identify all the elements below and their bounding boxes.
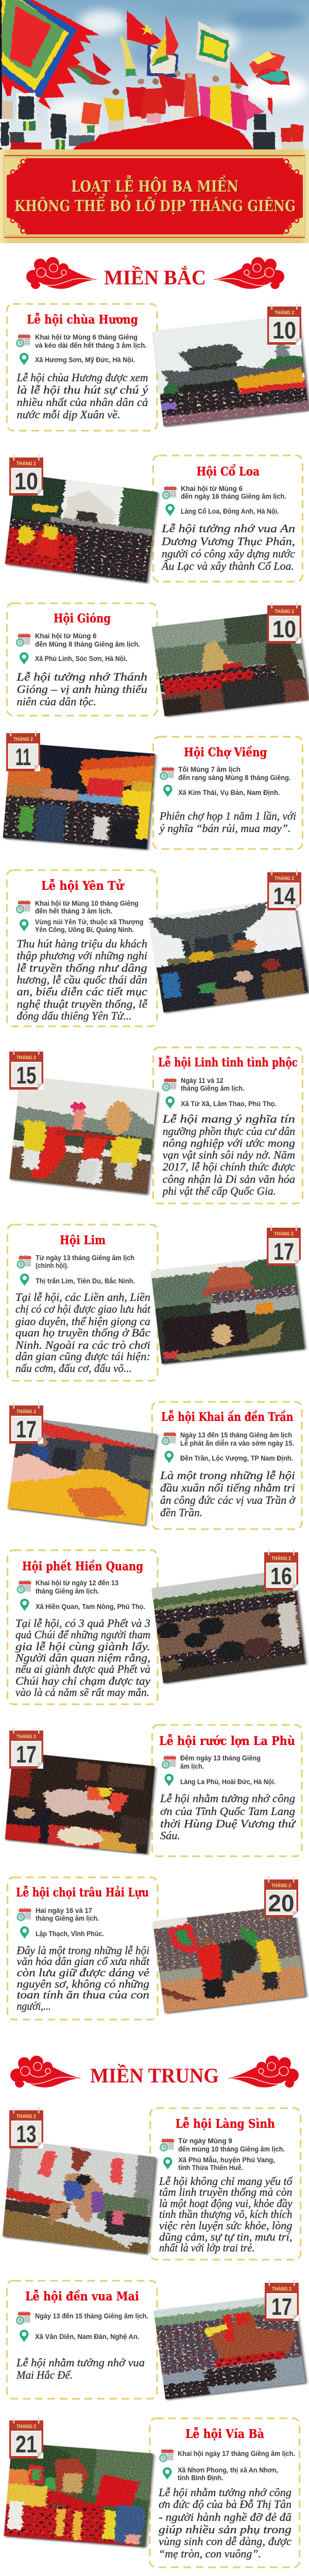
- description: [161, 522, 295, 572]
- panel: Lễ hội rước lợn La Phù: [5, 1725, 302, 1856]
- description: hương, lễ cầu quốc thái dân: [16, 973, 147, 986]
- description: Ninh. Ngoài ra các trò chơi: [15, 1338, 150, 1351]
- description: Phiên chợ họp 1 năm 1 lần, với: [159, 809, 296, 822]
- location text: [178, 2466, 278, 2482]
- people: [104, 98, 124, 121]
- date text: đến ngày 16 tháng Giêng âm lịch.: [181, 493, 286, 500]
- calendar: 13: [9, 2107, 43, 2148]
- photo: Cổ Loa: [5, 473, 159, 583]
- description: niên của dân tộc.: [16, 695, 96, 708]
- photo: rước lợn La Phù: [5, 1752, 156, 1855]
- description: vào là cả năm sẽ rất may mắn.: [15, 1686, 149, 1699]
- panel: Lễ hội Làng Sình: [3, 2107, 301, 2260]
- calendar: 17: 17: [271, 2293, 292, 2320]
- description: Người dân quan niệm rằng,: [15, 1651, 150, 1664]
- description: ơn đức độ của bà Đỗ Thị Tân: [159, 2498, 291, 2511]
- festival title: Lễ hội đền vua Mai: [25, 2290, 139, 2303]
- description: Là một trong những lễ hội: [160, 1469, 295, 1482]
- description: quan họ truyền thống ở Bắc: [15, 1326, 150, 1339]
- info card: [150, 2418, 300, 2567]
- calendar: 20: 20: [268, 1890, 295, 1917]
- date text: đến Mùng 8 tháng Giêng âm lịch.: [35, 640, 140, 648]
- calendar: 14: [267, 869, 301, 910]
- main title: [14, 175, 296, 215]
- description: [160, 1469, 296, 1519]
- hero photo: festival procession with flags: [0, 0, 309, 149]
- photo: Linh tinh tình phộc: [9, 1076, 159, 1195]
- description: ân công đức các vị vua Trần ở: [160, 1494, 296, 1506]
- title banner: [0, 149, 309, 243]
- date text: [181, 1077, 244, 1092]
- description: người có công xây dựng nước: [162, 547, 295, 560]
- date text: Từ ngày Mùng 9: [178, 2137, 232, 2145]
- calendar: 13: 13: [16, 2121, 36, 2147]
- description: Lễ hội không chỉ mang yếu tố: [159, 2175, 293, 2188]
- panel: Hội Cổ Loa: [5, 454, 302, 583]
- calendar: 11: [6, 730, 40, 771]
- panel: Hội Gióng: [7, 602, 309, 717]
- banners: [17, 93, 36, 121]
- location text: Xã Vân Diên, Nam Đàn, Nghệ An.: [35, 2333, 140, 2341]
- section heading: Miền Bắc: MIỀN BẮC: [104, 266, 206, 289]
- date text: Tối Mùng 7 âm lịch: [178, 766, 241, 773]
- info card: [7, 2281, 157, 2399]
- description: vạn vật sinh sôi nảy nở. Năm: [163, 1148, 295, 1161]
- description: Âu Lạc và xây thành Cổ Loa.: [161, 560, 294, 572]
- description: [16, 1944, 150, 2012]
- description: [16, 371, 148, 421]
- description: [16, 937, 148, 1022]
- description: thập phương với những nghi: [16, 949, 147, 962]
- description: phi vật thể cấp Quốc Gia.: [162, 1184, 276, 1197]
- description: [160, 1792, 296, 1842]
- location text: Xã Hương Sơn, Mỹ Đức, Hà Nội.: [35, 356, 135, 364]
- icon: calendar clock: [162, 486, 177, 499]
- festival title: Hội Chợ Viềng: [184, 745, 267, 759]
- location text: Xã Tứ Xã, Lâm Thao, Phú Thọ.: [181, 1100, 277, 1108]
- calendar: 17: [267, 1225, 301, 1266]
- location text: [35, 918, 144, 934]
- date text: [181, 485, 286, 500]
- photo: Vía Bà: [0, 2442, 154, 2548]
- info card: [150, 2108, 301, 2260]
- festival title: Lễ hội rước lợn La Phù: [159, 1734, 295, 1748]
- icon: calendar clock: [16, 1580, 31, 1594]
- date text: [35, 632, 140, 648]
- description: Tại lễ hội, có 3 quả Phết và 3: [15, 1617, 150, 1630]
- description: [16, 2356, 145, 2381]
- date text: Lễ phát ấn diễn ra vào sớm ngày 15.: [180, 1439, 294, 1447]
- date text: [178, 766, 290, 782]
- description: quả Chúi để những người tham: [15, 1628, 150, 1641]
- description: - người hành nghề đỡ đẻ đã: [159, 2511, 291, 2523]
- photo: Hội Gióng: [152, 611, 309, 717]
- description: văn hóa dân gian cổ xưa nhất: [16, 1955, 150, 1968]
- icon: calendar clock: [162, 1078, 177, 1091]
- festival title: Hội phết Hiền Quang: [22, 1560, 143, 1573]
- date text: Khai hội ngày 17 tháng Giêng âm lịch.: [178, 2450, 295, 2458]
- date text: và kéo dài đến hết tháng 3 âm lịch.: [35, 342, 147, 349]
- date text: đến rạng sáng Mùng 8 tháng Giêng.: [178, 774, 290, 782]
- icon: location pin: [166, 1096, 175, 1109]
- info card: [153, 1047, 302, 1204]
- description: Lễ hội tưởng nhớ Thánh: [16, 670, 147, 683]
- info card: [153, 455, 302, 582]
- icon: location pin: [163, 2467, 172, 2480]
- festival title: Hội Lim: [60, 1233, 106, 1247]
- festival title: Lễ hội chọi trâu Hải Lựu: [16, 1886, 149, 1900]
- icon: calendar clock: [160, 2138, 174, 2151]
- calendar: 10: 10: [272, 616, 296, 642]
- icon: calendar clock: [16, 2311, 30, 2325]
- icon: calendar clock: [162, 1432, 176, 1445]
- festival title: Lễ hội chùa Hương: [27, 313, 138, 327]
- icon: calendar clock: [159, 2449, 174, 2462]
- info card: [7, 1225, 158, 1381]
- location text: Vùng núi Yên Tử, thuộc xã Thượng: [35, 918, 144, 926]
- description: Lễ hội tưởng nhớ vua An: [161, 522, 295, 535]
- date text: Từ ngày 13 tháng Giêng âm lịch: [36, 1254, 134, 1262]
- panel: Hội Chợ Viềng: [3, 730, 302, 850]
- description: thời Hùng Duệ Vương thứ: [160, 1817, 296, 1830]
- panel: Hội phết Hiền Quang: [7, 1549, 306, 1704]
- info card: [7, 1550, 158, 1704]
- description: Sáu.: [160, 1829, 180, 1842]
- description: [15, 1291, 151, 1375]
- photo: chợ Viềng: [3, 742, 156, 850]
- description: đầu xuân nổi tiếng nhằm tri: [160, 1481, 295, 1494]
- description: Tại lễ hội, các Liền anh, Liền: [15, 1291, 150, 1303]
- date text: [35, 333, 147, 349]
- date text: Đêm ngày 13 tháng Giêng: [180, 1754, 261, 1762]
- description: nông nghiệp với ước mong: [163, 1137, 295, 1149]
- description: dũng cảm, sự tự tin, mưu trí,: [159, 2230, 293, 2243]
- location text: Yên Công, Uông Bí, Quảng Ninh.: [35, 926, 134, 934]
- photo: phết Hiền Quang: [152, 1569, 306, 1684]
- calendar: 10: [267, 303, 301, 345]
- photo: Yên Tử: [149, 898, 309, 1013]
- description: nếu ai giành được quả Phết và: [15, 1663, 150, 1675]
- icon: calendar clock: [16, 1255, 31, 1268]
- section heading: Miền Bắc: [26, 257, 284, 289]
- date text: đến mùng 10 tháng Giêng âm lịch.: [178, 2145, 285, 2153]
- icon: location pin: [20, 919, 29, 931]
- icon: location pin: [165, 1451, 174, 1463]
- panel: Lễ hội đền vua Mai: [7, 2280, 307, 2400]
- date text: tháng Giêng âm lịch.: [36, 1914, 99, 1922]
- section heading: Miền Trung: [10, 2056, 299, 2088]
- info card: [152, 1402, 302, 1529]
- description: [15, 1617, 150, 1699]
- panel: Lễ hội Vía Bà: [0, 2417, 300, 2567]
- description: ý nghĩa “bán rủi, mua may”.: [159, 822, 290, 835]
- icon: location pin: [20, 1926, 29, 1939]
- panel: Lễ hội chùa Hương: [7, 303, 309, 431]
- location text: Xã Phù Linh, Sóc Sơn, Hà Nội.: [35, 655, 127, 663]
- calendar: 17: 17: [273, 1238, 294, 1265]
- description: Lễ hội nhằm tưởng nhớ vua: [16, 2356, 145, 2369]
- big flag: [2, 0, 99, 110]
- icon: calendar clock: [160, 767, 174, 780]
- calendar: 20: [264, 1876, 298, 1918]
- description: lễ truyền thống như dâng: [16, 961, 147, 974]
- icon: location pin: [163, 2157, 172, 2170]
- description: nhất là với lớp trai trẻ.: [159, 2241, 254, 2254]
- festival title: Lễ hội Yên Tử: [41, 879, 125, 893]
- centre flags: [127, 11, 163, 45]
- description: [159, 809, 296, 835]
- description: Dương Vương Thục Phán,: [161, 535, 295, 548]
- calendar: 10: [267, 602, 301, 643]
- festival title: Hội Gióng: [54, 612, 111, 625]
- photo: Hội Lim: [148, 1256, 309, 1365]
- description: [162, 1112, 295, 1197]
- description: nhiều nhất của nhân dân cả: [16, 396, 148, 409]
- description: 2017, lễ hội chính thức được: [163, 1160, 295, 1173]
- icon: location pin: [165, 1774, 174, 1786]
- info card: [153, 737, 302, 849]
- location text: [178, 2156, 275, 2172]
- panel: Lễ hội chọi trâu Hải Lựu: [7, 1876, 307, 2020]
- festival title: Lễ hội Làng Sình: [176, 2117, 275, 2131]
- description: Mai Hắc Đế.: [16, 2368, 73, 2381]
- location text: Xã Kim Thái, Vụ Bản, Nam Định.: [178, 789, 280, 796]
- date text: [180, 1754, 261, 1770]
- description: người,...: [16, 1999, 51, 2012]
- description: nấu cơm, đấu cơ, đấu võ...: [15, 1362, 132, 1375]
- panel: Lễ hội Linh tinh tình phộc: [9, 1047, 302, 1204]
- info card: [7, 603, 157, 716]
- date text: Khai hội từ Mùng 6: [35, 632, 97, 640]
- calendar: 10: [9, 454, 43, 496]
- calendar: 17: [9, 1402, 43, 1444]
- date text: Khai hội từ Mùng 6: [181, 485, 243, 493]
- date text: Ngày 11 và 12: [181, 1077, 224, 1084]
- description: giúp nhiều sản phụ trong: [159, 2523, 291, 2536]
- icon: location pin: [20, 2330, 29, 2342]
- info card: [7, 870, 157, 1026]
- description: gia lễ hội cùng giành lấy.: [15, 1640, 150, 1653]
- date text: Khai hội từ Mùng 6 tháng Giêng: [35, 333, 138, 341]
- description: Lễ hội chùa Hương được xem: [16, 371, 148, 384]
- date text: Khai hội từ ngày 12 đến 13: [36, 1579, 118, 1587]
- info card: [152, 1725, 302, 1856]
- description: Lễ hội nhằm tưởng nhớ công: [160, 1792, 295, 1805]
- description: Đây là một trong những lễ hội: [16, 1944, 149, 1957]
- info card: [7, 1877, 158, 2020]
- calendar: 21: 21: [15, 2431, 37, 2458]
- description: còn lưu giữ được dáng vẻ: [16, 1966, 149, 1979]
- calendar: 14: 14: [273, 883, 296, 909]
- description: công nhận là Di sản văn hóa: [163, 1173, 295, 1185]
- calendar: 17: [265, 2280, 299, 2321]
- date text: âm lịch.: [180, 1762, 204, 1770]
- description: tinh thần thượng võ, kích thích: [159, 2208, 293, 2221]
- date text: [36, 1254, 134, 1269]
- icon: location pin: [20, 652, 29, 665]
- icon: location pin: [166, 504, 175, 516]
- icon: calendar clock: [16, 1908, 31, 1921]
- date text: tháng Giêng âm lịch.: [181, 1084, 244, 1092]
- date text: Khai hội từ Mùng 10 tháng Giêng: [35, 900, 139, 907]
- description: đền Trần.: [160, 1506, 202, 1519]
- description: vùng sinh con dễ dàng, được: [159, 2535, 291, 2548]
- description: giao duyên, thể hiện giọng ca: [15, 1315, 150, 1328]
- description: chị có cơ hội được giao lưu hát: [15, 1302, 151, 1315]
- description: đóng dấu thiêng Yên Tử...: [16, 1009, 132, 1022]
- description: [16, 670, 147, 708]
- festival title: Lễ hội Vía Bà: [185, 2427, 264, 2441]
- location text: Xã Nhơn Phong, thị xã An Nhơn,: [178, 2466, 278, 2474]
- description: ngưỡng phồn thực của cư dân: [163, 1125, 295, 1138]
- description: tâm linh truyền thống mà còn: [159, 2185, 293, 2198]
- photo: vật làng Sình: [3, 2140, 157, 2255]
- icon: location pin: [20, 1599, 29, 1611]
- description: [159, 2175, 293, 2254]
- description: là một hoạt động vui, khỏe đầy: [159, 2197, 293, 2210]
- panel: Lễ hội Khai ấn đền Trần: [7, 1402, 302, 1529]
- calendar: 10: 10: [272, 317, 296, 344]
- icon: calendar clock: [162, 1755, 176, 1769]
- location text: tỉnh Thừa Thiên Huế.: [178, 2164, 243, 2172]
- date text: (chính hội).: [36, 1262, 68, 1269]
- calendar: 17: [9, 1727, 43, 1769]
- calendar: 15: [9, 1048, 43, 1090]
- calendar: 11: 11: [15, 743, 31, 770]
- calendar: 16: 16: [270, 1563, 292, 1589]
- location text: Đền Trần, Lộc Vượng, TP Nam Định.: [180, 1454, 293, 1462]
- description: nguyên sơ, không có những: [16, 1977, 149, 1990]
- icon: calendar clock: [16, 633, 30, 647]
- festival title: Hội Cổ Loa: [197, 464, 260, 479]
- description: Thu hút hàng triệu du khách: [16, 937, 147, 950]
- location text: Thị trấn Lim, Tiên Du, Bắc Ninh.: [36, 1277, 135, 1285]
- description: việc rèn luyện sức khỏe, lòng: [159, 2219, 293, 2232]
- date text: tháng Giêng âm lịch.: [36, 1587, 99, 1595]
- photo: đền vua Mai: [153, 2294, 307, 2400]
- date text: đến hết tháng 3 âm lịch.: [35, 907, 112, 915]
- icon: calendar clock: [16, 334, 30, 347]
- section heading: Miền Trung: MIỀN TRUNG: [90, 2064, 219, 2087]
- panel: Hội Lim: [7, 1225, 309, 1381]
- description: “mẹ tròn, con vuông”.: [159, 2547, 261, 2560]
- calendar: 16: [264, 1549, 298, 1590]
- description: toan tính ăn thua của con: [16, 1988, 149, 2001]
- description: Gióng – vị anh hùng thiếu: [16, 683, 147, 696]
- description: ơn của Tĩnh Quốc Tam Lang: [160, 1805, 295, 1818]
- description: Lễ hội nhằm tưởng nhớ công: [158, 2486, 291, 2499]
- calendar: 17: 17: [16, 1741, 37, 1768]
- calendar: 15: 15: [16, 1062, 36, 1089]
- icon: calendar clock: [16, 900, 30, 913]
- date text: [36, 1907, 99, 1922]
- icon: location pin: [163, 785, 172, 797]
- panel: Lễ hội Yên Tử: [7, 869, 309, 1026]
- calendar: 17: 17: [16, 1416, 37, 1443]
- description: [158, 2486, 291, 2560]
- location text: tỉnh Bình Định.: [178, 2474, 224, 2482]
- calendar: 10: 10: [14, 468, 38, 495]
- description: Lễ hội mang ý nghĩa tín: [162, 1112, 295, 1125]
- main title: LOẠT LỄ HỘI BA MIỀN: [71, 175, 238, 196]
- info card: [7, 304, 157, 431]
- location text: Làng La Phù, Hoài Đức, Hà Nội.: [180, 1778, 276, 1786]
- location text: Xã Hiền Quan, Tam Nông, Phú Thọ.: [36, 1603, 145, 1611]
- date text: Ngày 13 đến 15 tháng Giêng âm lịch.: [35, 2312, 148, 2320]
- date text: [180, 1431, 294, 1447]
- calendar: 21: [9, 2417, 43, 2459]
- description: Chúi hay chỉ chạm được tay: [15, 1674, 150, 1687]
- date text: [35, 900, 139, 915]
- date text: [36, 1579, 118, 1595]
- location text: Làng Cổ Loa, Đông Anh, Hà Nội.: [181, 507, 279, 515]
- date text: Ngày 13 đến 15 tháng Giêng âm lịch: [180, 1431, 292, 1439]
- description: là lễ hội thu hút sự chú ý: [16, 383, 148, 396]
- red mound: [73, 115, 253, 149]
- icon: location pin: [20, 1274, 29, 1286]
- date text: [178, 2137, 285, 2153]
- photo: chọi trâu Hải Lựu: [153, 1905, 307, 2014]
- description: nước mỗi dịp Xuân về.: [16, 408, 121, 421]
- description: an, biểu diễn các tiết mục: [16, 985, 147, 998]
- description: dân gian cũng được tái hiện:: [15, 1350, 150, 1363]
- location text: Xã Phú Mẫu, huyện Phú Vang,: [178, 2156, 275, 2164]
- date text: Hai ngày 16 và 17: [36, 1907, 92, 1914]
- photo: chùa Hương: [151, 315, 309, 427]
- photo: Khai ấn: [7, 1417, 158, 1526]
- description: nghệ thuật truyền thống, lễ: [16, 997, 148, 1010]
- icon: location pin: [20, 353, 29, 365]
- location text: Lập Thạch, Vĩnh Phúc.: [36, 1930, 104, 1938]
